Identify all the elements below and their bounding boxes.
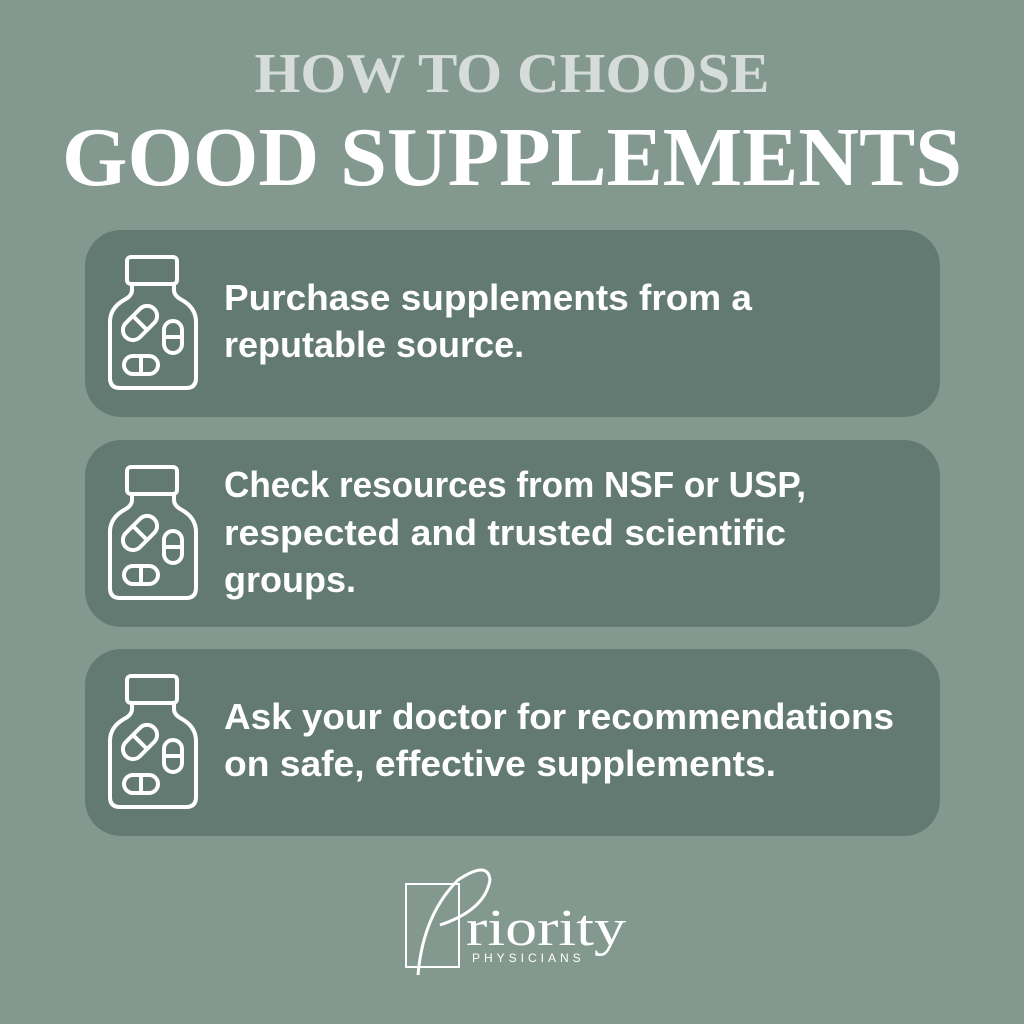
logo xyxy=(406,870,626,975)
panel: tip 2: Check resources from NSF or USP, xyxy=(224,464,806,505)
title xyxy=(62,43,962,204)
panel: tip 1 xyxy=(85,230,940,417)
panel: tip 2: respected and trusted scientific xyxy=(224,512,786,553)
panel: tip 2: groups. xyxy=(224,559,356,600)
panel: tip 3: on safe, effective supplements. xyxy=(224,743,776,784)
icon: bottle 1 xyxy=(110,257,196,388)
title: GOOD SUPPLEMENTS xyxy=(62,111,962,204)
icon: bottle 2 xyxy=(110,467,196,598)
logo: PHYSICIANS xyxy=(472,951,585,965)
panel: tip 2 xyxy=(85,440,940,627)
panel: tip 3: Ask your doctor for recommendations xyxy=(224,696,894,737)
panel: tip 1: reputable source. xyxy=(224,324,524,365)
title: HOW TO CHOOSE xyxy=(254,43,770,105)
panel: tip 1: Purchase supplements from a xyxy=(224,277,753,318)
icon: bottle 3 xyxy=(110,676,196,807)
panel: tip 3 xyxy=(85,649,940,836)
logo: riority xyxy=(466,900,626,957)
